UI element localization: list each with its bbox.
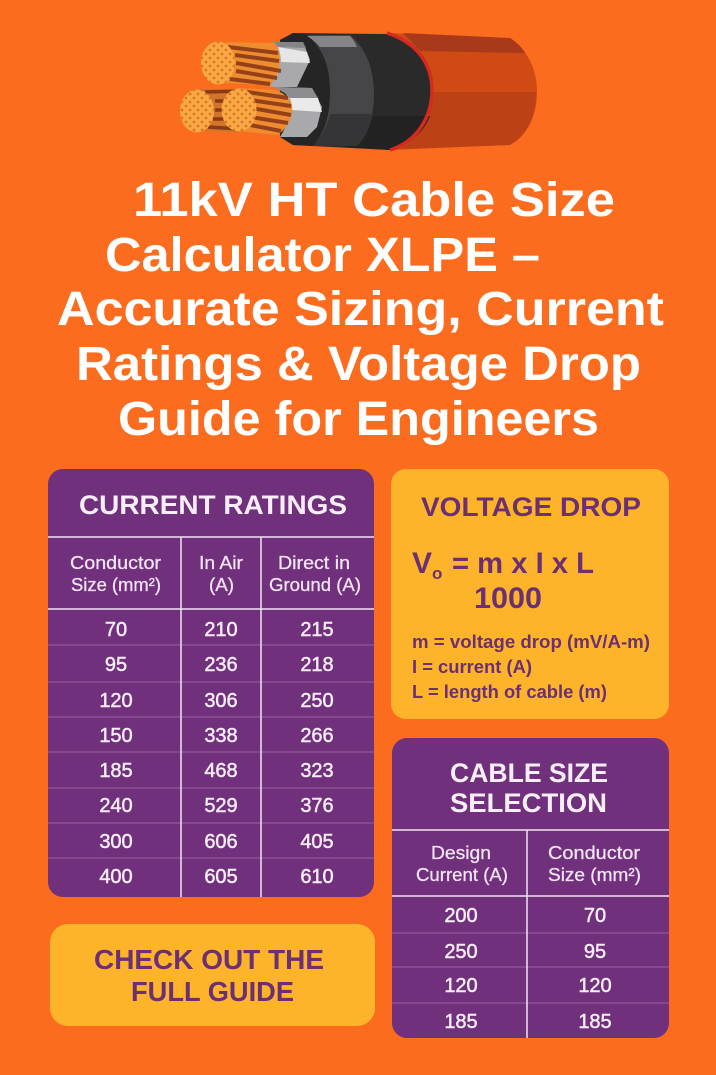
table rows: current ratings: 529 (204, 795, 238, 817)
table rows: cable size selection: 185 (444, 1011, 478, 1033)
silver insulation upper core (270, 42, 310, 87)
button: check out the full guide: CHECK OUT THE (94, 944, 324, 975)
heading: cable size selection: CABLE SIZE (450, 758, 608, 788)
heading: current ratings: CURRENT RATINGS (79, 490, 347, 520)
table rows: current ratings: 150 (99, 725, 133, 747)
table rows: cable size selection: 185 (578, 1011, 612, 1033)
table rows: current ratings: 70 (105, 619, 127, 641)
table rows: current ratings: 266 (300, 725, 334, 747)
button: check out the full guide (50, 924, 375, 1026)
table header: cable size selection: Design (431, 842, 491, 863)
table rows: current ratings: 218 (300, 654, 334, 676)
table rows: cable size selection: 95 (584, 941, 606, 963)
table rows: cable size selection: 120 (444, 975, 478, 997)
title: Calculator XLPE – (105, 229, 540, 282)
table rows: cable size selection: 120 (578, 975, 612, 997)
formula: o (432, 564, 442, 583)
table rows: current ratings: 468 (204, 760, 238, 782)
lower copper conductors (197, 88, 292, 135)
table rows: cable size selection (444, 905, 612, 1033)
heading: voltage drop: VOLTAGE DROP (421, 492, 641, 522)
table rows: current ratings: 95 (105, 654, 127, 676)
table rows: current ratings: 338 (204, 725, 238, 747)
title: Guide for Engineers (118, 393, 599, 446)
title: Ratings & Voltage Drop (76, 338, 641, 391)
table rows: current ratings: 210 (204, 619, 238, 641)
table rows: current ratings: 376 (300, 795, 334, 817)
title: Accurate Sizing, Current (57, 283, 664, 336)
table rows: current ratings: 215 (300, 619, 334, 641)
table header: cable size selection: Conductor (548, 842, 640, 863)
table header: cable size selection (416, 842, 641, 885)
formula: = m x I x L (452, 547, 594, 580)
table rows: current ratings: 405 (300, 831, 334, 853)
upper conductor end face (201, 42, 235, 84)
table rows: current ratings: 240 (99, 795, 133, 817)
button: check out the full guide: FULL GUIDE (131, 976, 294, 1007)
panel: current ratings (48, 469, 374, 897)
formula legend: L = length of cable (m) (412, 682, 607, 702)
table rows: current ratings: 323 (300, 760, 334, 782)
table rows: current ratings: 120 (99, 690, 133, 712)
formula (412, 547, 594, 615)
table header: current ratings: Direct in (278, 552, 350, 573)
formula legend (412, 632, 650, 702)
black insulation layers (280, 33, 432, 150)
formula legend: m = voltage drop (mV/A-m) (412, 632, 650, 652)
table rows: current ratings: 400 (99, 866, 133, 888)
upper copper conductor (220, 42, 281, 85)
table rows: current ratings: 300 (99, 831, 133, 853)
table header: current ratings: Ground (A) (269, 574, 361, 595)
table rows: current ratings (99, 619, 334, 888)
table rows: current ratings: 606 (204, 831, 238, 853)
lower conductor end faces (180, 88, 256, 132)
heading: cable size selection (450, 758, 608, 818)
table rows: current ratings: 236 (204, 654, 238, 676)
table header: current ratings: (A) (209, 574, 234, 595)
table header: current ratings: Conductor (70, 552, 161, 573)
formula: V (412, 547, 432, 580)
illustration: three-core XLPE cable (180, 33, 537, 150)
table rows: current ratings: 605 (204, 866, 238, 888)
table header: cable size selection: Current (A) (416, 864, 508, 885)
table rows: cable size selection: 70 (584, 905, 606, 927)
formula legend: I = current (A) (412, 657, 532, 677)
outer red-orange sheath (387, 33, 537, 150)
heading: cable size selection: SELECTION (450, 788, 607, 818)
title (57, 174, 664, 446)
panel: voltage drop (391, 469, 669, 719)
silver insulation lower core (273, 87, 322, 137)
panel: cable size selection (392, 738, 669, 1038)
table rows: cable size selection: 200 (444, 905, 478, 927)
table header: cable size selection: Size (mm²) (548, 864, 641, 885)
table header: current ratings: Size (mm²) (71, 574, 161, 595)
formula: 1000 (474, 582, 542, 615)
table rows: current ratings: 306 (204, 690, 238, 712)
title: 11kV HT Cable Size (133, 174, 615, 227)
table rows: cable size selection: 250 (444, 941, 478, 963)
table rows: current ratings: 185 (99, 760, 133, 782)
table rows: current ratings: 610 (300, 866, 334, 888)
table header: current ratings (70, 552, 361, 595)
table rows: current ratings: 250 (300, 690, 334, 712)
table header: current ratings: In Air (199, 552, 243, 573)
